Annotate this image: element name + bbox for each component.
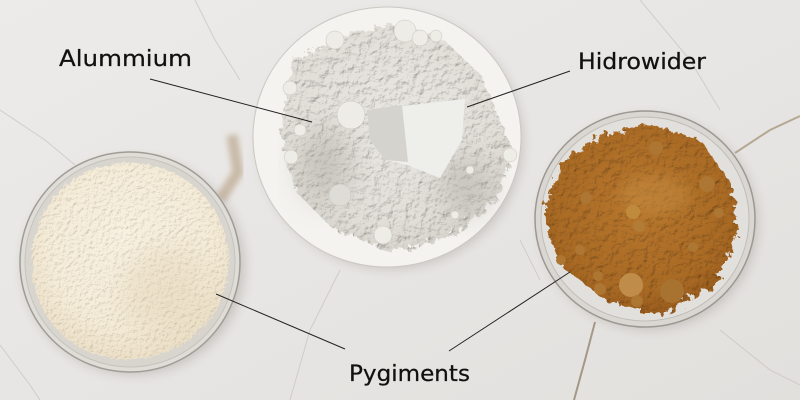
panel: left bowl with cream powder: [20, 152, 244, 374]
label: Hidrowider: Hidrowider: [578, 50, 707, 75]
arrow: Alummium leader line: [150, 79, 312, 122]
cream powder: [32, 163, 228, 359]
bowl shadow: [24, 158, 244, 374]
white powder mound: [280, 24, 512, 252]
label: Alummium: Alummium: [59, 47, 192, 72]
arrow: Pygiments leader line to cream powder: [216, 294, 345, 349]
plate: [253, 7, 521, 267]
bowl shadow: [541, 117, 757, 329]
label: Pygiments: Pygiments: [349, 362, 470, 387]
glass bowl: [20, 152, 240, 372]
arrow: Pygiments leader line to ochre powder: [449, 272, 570, 351]
ochre powder: [544, 124, 738, 315]
panel: right bowl with ochre powder: [535, 111, 757, 329]
granules: [556, 141, 724, 307]
large white chunk: [367, 99, 465, 178]
chunks: [283, 20, 517, 244]
arrow: Hidrowider leader line: [467, 71, 570, 107]
panel: center plate with white powder: [253, 7, 522, 268]
plate shadow: [260, 14, 522, 268]
glass bowl: [535, 111, 755, 327]
